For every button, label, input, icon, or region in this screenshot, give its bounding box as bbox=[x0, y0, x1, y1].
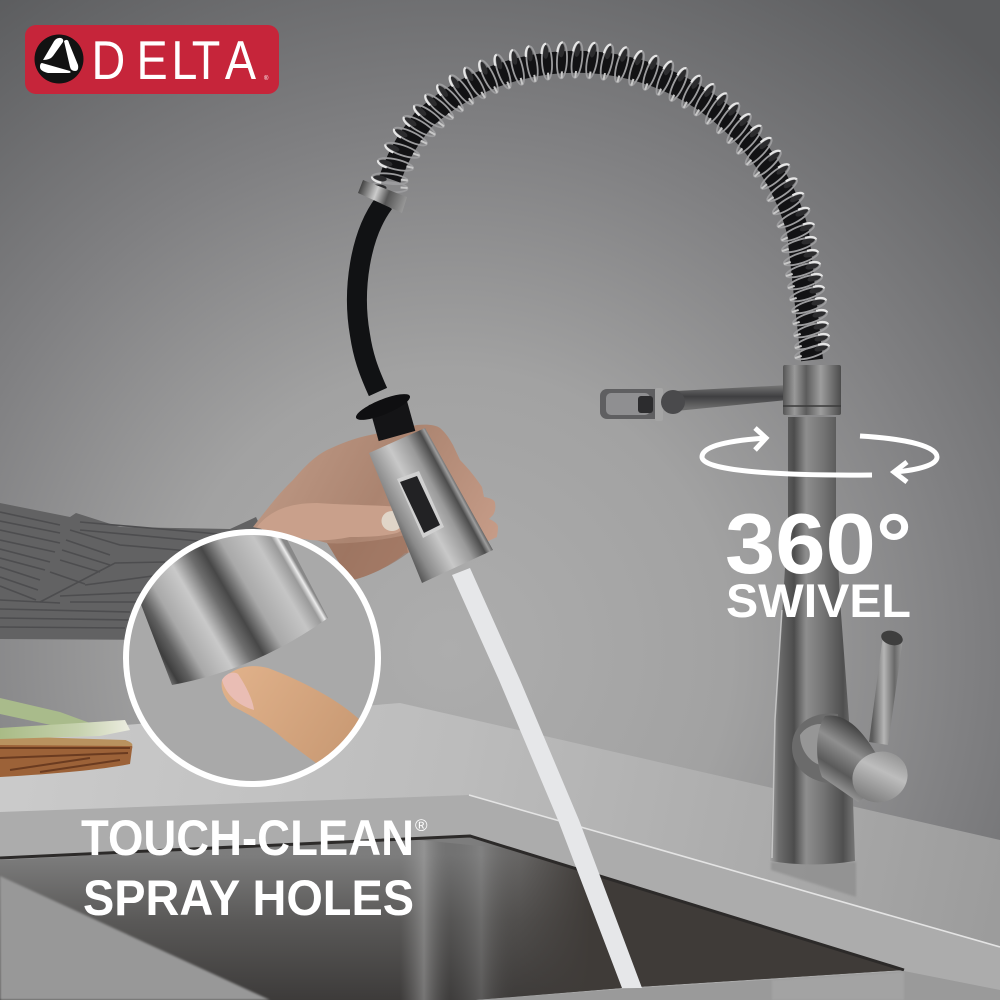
Delta logo bbox=[25, 25, 279, 94]
spout arm and clamp bbox=[600, 384, 808, 421]
faucet body bbox=[770, 365, 855, 864]
sweater sleeve bbox=[0, 503, 262, 640]
black neck and flange bbox=[353, 389, 413, 436]
touch-clean label: TOUCH-CLEAN bbox=[81, 810, 414, 866]
Delta logo: DELTA bbox=[92, 29, 256, 91]
icon: delta emblem bbox=[34, 34, 84, 84]
faucet reflection on counter bbox=[771, 862, 904, 1000]
360 degree heading: 360° bbox=[725, 497, 912, 592]
spray head close-up bbox=[141, 535, 328, 685]
spring coil bbox=[371, 42, 831, 362]
inset circle: touch-clean detail bbox=[123, 529, 381, 787]
countertop bbox=[0, 703, 1000, 1000]
sink basin bbox=[0, 836, 1000, 1000]
black hose bbox=[357, 203, 384, 392]
Delta logo: ® bbox=[264, 75, 269, 82]
touch-clean label: ® bbox=[415, 816, 428, 835]
spray head bbox=[369, 428, 493, 583]
touch-clean label bbox=[81, 810, 428, 926]
cutting board and scallions bbox=[0, 698, 132, 777]
swivel label: SWIVEL bbox=[726, 574, 911, 627]
mixer lever handle bbox=[792, 628, 915, 811]
hose collar bbox=[358, 180, 407, 213]
touch-clean label: SPRAY HOLES bbox=[83, 870, 414, 926]
spray button bbox=[397, 471, 444, 538]
icon: thumb bbox=[257, 503, 407, 540]
water stream bbox=[452, 568, 642, 988]
hand holding spray head bbox=[253, 425, 498, 580]
finger touching spray holes bbox=[222, 666, 362, 766]
swivel arrows bbox=[702, 428, 937, 482]
